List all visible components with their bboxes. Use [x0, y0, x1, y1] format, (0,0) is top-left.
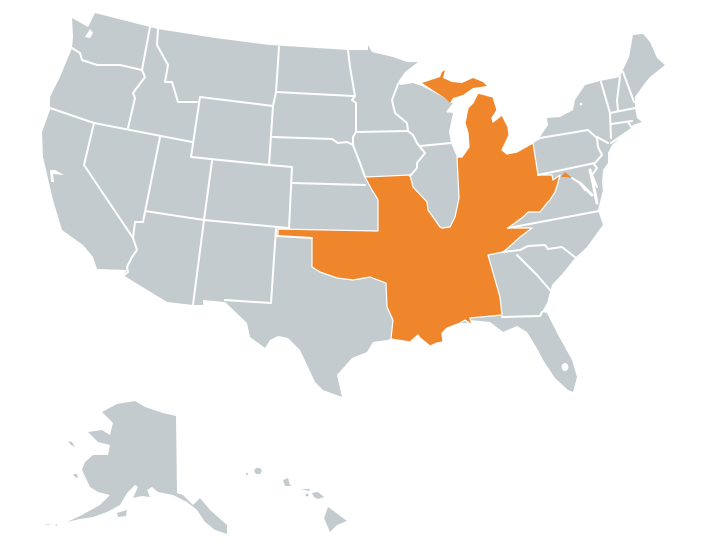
contiguous states silhouette: [42, 13, 665, 397]
Alaska: [43, 401, 227, 534]
highlighted states: Upper Michigan: [422, 70, 487, 103]
Hawaii: [246, 468, 347, 532]
highlighted states: central and southern region: [278, 93, 572, 347]
water features: Puget Sound, San Francisco Bay, Green Bay, lakes: [50, 29, 582, 371]
state borders: [50, 27, 635, 317]
